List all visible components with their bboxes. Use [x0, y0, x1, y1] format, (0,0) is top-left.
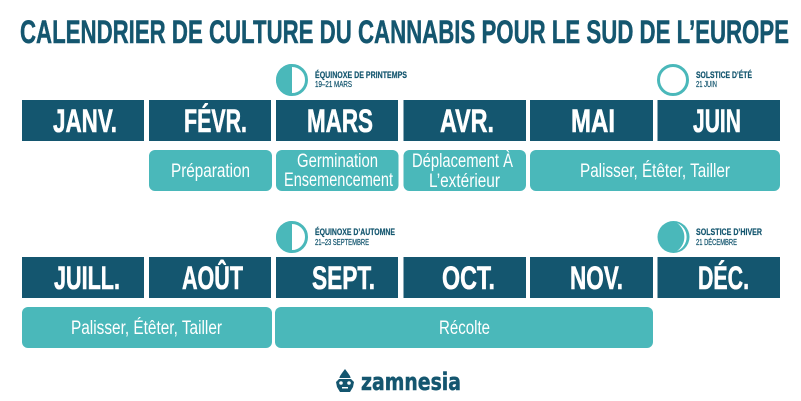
label: summer solstice: SOLSTICE D’ÉTÉ	[696, 70, 752, 81]
month: decembre	[658, 257, 780, 298]
pill: train top prune: Palisser, Étêter, Tailler	[71, 318, 223, 339]
month: juin	[658, 100, 780, 141]
icon: autumn equinox half moon	[276, 221, 306, 253]
label: winter solstice: SOLSTICE D’HIVER	[696, 227, 762, 238]
icon: spring equinox half moon	[276, 64, 306, 96]
month: mai: MAI	[571, 103, 615, 139]
month: novembre	[530, 257, 653, 298]
month: mai	[530, 100, 653, 141]
pill: outdoor move	[404, 150, 526, 192]
month: juin: JUIN	[693, 103, 741, 139]
activity row 2	[22, 307, 653, 348]
month: septembre: SEPT.	[312, 260, 375, 296]
pill: train top prune	[530, 150, 780, 191]
icon: summer solstice ring	[658, 66, 688, 94]
pill: germination: Germination	[297, 151, 378, 172]
pill: preparation: Préparation	[171, 161, 250, 182]
month: novembre: NOV.	[570, 260, 623, 296]
month: avril: AVR.	[440, 103, 494, 139]
month: octobre: OCT.	[442, 260, 495, 296]
pill: outdoor move: L’extérieur	[429, 171, 501, 192]
month: janvier	[22, 100, 144, 141]
month: decembre: DÉC.	[698, 260, 749, 296]
pill: outdoor move: Déplacement À	[412, 151, 513, 172]
label: spring equinox: 19–21 MARS	[315, 79, 352, 89]
month: fevrier	[149, 100, 271, 141]
month: mars: MARS	[307, 103, 373, 139]
label: spring equinox	[315, 70, 407, 89]
month: mars	[276, 100, 398, 141]
pill: germination	[276, 150, 398, 191]
label: spring equinox: ÉQUINOXE DE PRINTEMPS	[315, 70, 407, 81]
label: summer solstice: 21 JUIN	[696, 79, 717, 89]
icon: winter solstice crescent	[658, 221, 690, 253]
month: juillet	[22, 257, 144, 298]
pill: harvest	[275, 307, 653, 348]
month: aout: AOÛT	[182, 260, 243, 296]
month: avril	[404, 100, 526, 141]
month: janvier: JANV.	[53, 103, 117, 139]
label: autumn equinox: 21–23 SEPTEMBRE	[315, 237, 369, 247]
logo: zamnesia	[336, 368, 461, 396]
month: septembre	[276, 257, 398, 298]
month: octobre	[404, 257, 526, 298]
label: autumn equinox: ÉQUINOXE D’AUTOMNE	[315, 227, 395, 238]
label: autumn equinox	[315, 227, 395, 247]
activity row 1	[149, 150, 780, 192]
icon: logo mask	[336, 369, 354, 392]
month row 1	[22, 100, 780, 141]
wordmark: zamnesia	[361, 368, 461, 396]
month row 2	[22, 257, 780, 298]
label: winter solstice	[696, 227, 762, 247]
pill: harvest: Récolte	[439, 318, 490, 339]
label: winter solstice: 21 DÉCEMBRE	[696, 237, 737, 247]
pill: preparation	[149, 150, 272, 191]
pill: train top prune: Palisser, Étêter, Tailler	[580, 161, 731, 182]
label: summer solstice	[696, 70, 752, 89]
month: juillet: JUILL.	[54, 260, 120, 296]
pill: train top prune	[22, 307, 272, 348]
month: aout	[149, 257, 271, 298]
month: fevrier: FÉVR.	[184, 103, 247, 139]
pill: germination: Ensemencement	[284, 170, 394, 191]
